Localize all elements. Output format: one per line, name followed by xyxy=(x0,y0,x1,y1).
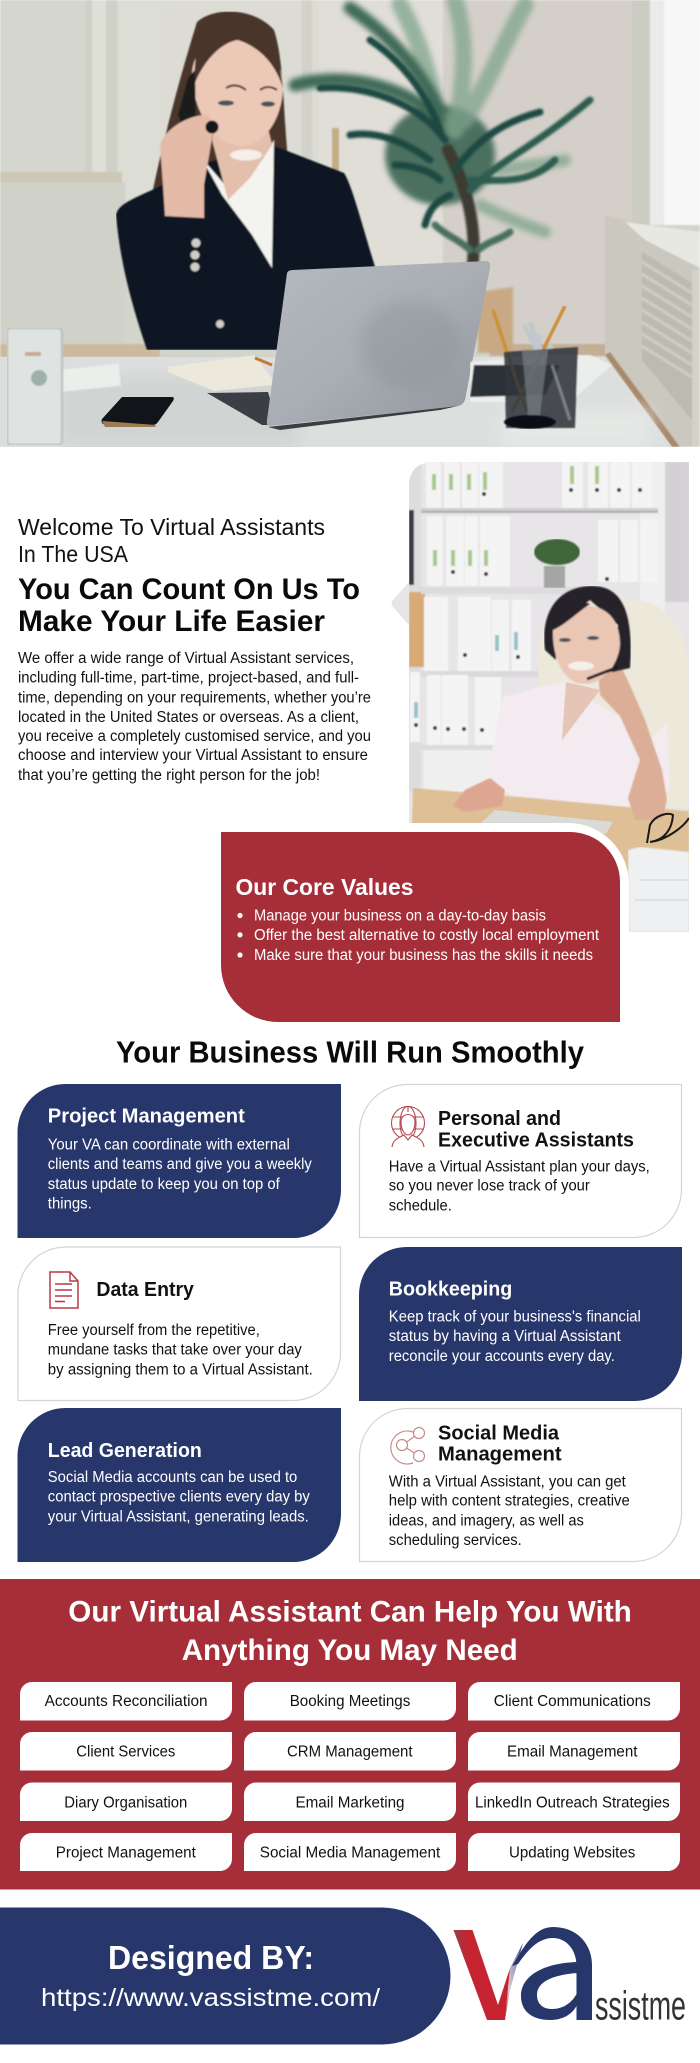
notebook xyxy=(168,355,272,391)
panel: services band xyxy=(0,1579,700,1890)
woman xyxy=(116,12,376,350)
card: bookkeeping: Bookkeeping xyxy=(389,1278,512,1301)
service buttons: Booking Meetings xyxy=(290,1693,411,1710)
shirt xyxy=(487,680,670,808)
card: bookkeeping: Keep track of your business's financial xyxy=(389,1309,641,1326)
eyeglasses xyxy=(647,814,689,843)
card: bookkeeping xyxy=(359,1247,682,1401)
welcome line: Welcome To Virtual Assistants xyxy=(18,514,325,540)
binders xyxy=(410,462,658,745)
icon: document xyxy=(50,1272,78,1308)
intro paragraph: including full-time, part-time, project-based, and full- xyxy=(18,670,359,686)
card: personal and executive assistants: Personal and xyxy=(438,1107,561,1130)
card: project management xyxy=(18,1084,341,1238)
panel: footer credit: Designed BY: xyxy=(108,1939,314,1976)
main heading: You Can Count On Us To xyxy=(18,573,360,606)
services heading xyxy=(68,1596,632,1667)
card: personal and executive assistants: Have a Virtual Assistant plan your days, xyxy=(389,1158,650,1175)
welcome line xyxy=(18,514,325,567)
office photo: smiling assistant with headset xyxy=(390,460,690,935)
chair xyxy=(537,598,688,808)
card: data entry: Data Entry xyxy=(96,1278,194,1301)
welcome line: In The USA xyxy=(18,541,129,567)
services heading: Anything You May Need xyxy=(182,1634,518,1667)
card: project management: Your VA can coordinate with external xyxy=(48,1136,290,1153)
service buttons: Client Communications xyxy=(494,1693,651,1710)
phone xyxy=(102,397,174,425)
service buttons: Client Services xyxy=(76,1744,176,1761)
panel: footer credit xyxy=(0,1908,450,2044)
main heading xyxy=(18,573,360,638)
intro paragraph: you receive a completely customised service, and you xyxy=(18,728,371,745)
card: lead generation: contact prospective clients every day by xyxy=(48,1488,310,1505)
card: lead generation: Social Media accounts can be used to xyxy=(48,1469,297,1486)
card: social media management: Social Media xyxy=(438,1421,560,1444)
intro paragraph: that you’re getting the right person for the job! xyxy=(18,767,320,784)
card: lead generation: Lead Generation xyxy=(48,1439,202,1462)
arm xyxy=(598,664,667,820)
card: personal and executive assistants: Executive Assistants xyxy=(438,1128,634,1151)
laptop xyxy=(207,261,490,430)
intro paragraph: time, depending on your requirements, whether you’re xyxy=(18,690,371,706)
core values list: Manage your business on a day-to-day basis xyxy=(254,908,546,925)
logo: VAssistme xyxy=(454,1927,686,2028)
core values heading: Our Core Values xyxy=(236,874,414,900)
panel: footer credit: https://www.vassistme.com/ xyxy=(41,1984,380,2012)
service buttons: Updating Websites xyxy=(509,1844,636,1861)
icon: globe with person xyxy=(392,1106,424,1147)
card: personal and executive assistants xyxy=(360,1084,682,1238)
card: personal and executive assistants: schedule. xyxy=(389,1198,452,1215)
plant xyxy=(295,0,590,262)
card: bookkeeping: status by having a Virtual Assistant xyxy=(389,1328,621,1345)
card: data entry: by assigning them to a Virtual Assistant. xyxy=(48,1361,313,1378)
card: data entry: Free yourself from the repetitive, xyxy=(48,1322,260,1339)
service buttons: Email Marketing xyxy=(296,1794,404,1811)
services heading: Our Virtual Assistant Can Help You With xyxy=(68,1596,632,1629)
intro text block xyxy=(18,514,371,784)
card: data entry: mundane tasks that take over your day xyxy=(48,1341,302,1358)
service buttons: Project Management xyxy=(56,1844,196,1861)
desk plant xyxy=(534,539,580,588)
service buttons: Accounts Reconciliation xyxy=(45,1693,208,1710)
service buttons: Email Management xyxy=(507,1744,638,1761)
hero photo: assistant at laptop xyxy=(0,0,700,447)
service buttons: Diary Organisation xyxy=(64,1794,187,1811)
core values list: Offer the best alternative to costly local employment xyxy=(254,927,600,944)
desk xyxy=(0,357,672,447)
card: project management: status update to keep you on top of xyxy=(48,1176,280,1193)
pencil on notebook xyxy=(255,358,272,365)
intro paragraph: We offer a wide range of Virtual Assistant services, xyxy=(18,650,354,667)
card: social media management xyxy=(360,1408,682,1562)
card: personal and executive assistants: so you never lose track of your xyxy=(389,1178,590,1195)
card: data entry xyxy=(18,1247,340,1400)
white ring around core values xyxy=(215,823,629,932)
card: social media management: Management xyxy=(438,1443,562,1466)
papers and pen holder xyxy=(470,306,612,429)
intro paragraph xyxy=(18,650,371,784)
icon: social network xyxy=(391,1428,424,1464)
card: social media management: ideas, and imagery, as well as xyxy=(389,1513,584,1530)
core values list: Make sure that your business has the skills it needs xyxy=(254,947,593,964)
panel: core values xyxy=(221,832,620,1022)
card: lead generation xyxy=(18,1408,341,1562)
card: social media management: scheduling services. xyxy=(389,1532,522,1549)
card: social media management: help with content strategies, creative xyxy=(389,1493,630,1510)
card: bookkeeping: reconcile your accounts every day. xyxy=(389,1348,615,1365)
card: social media management: With a Virtual Assistant, you can get xyxy=(389,1473,626,1490)
plant pot xyxy=(478,287,513,353)
core values list xyxy=(237,908,600,964)
service buttons: Social Media Management xyxy=(260,1844,441,1861)
section heading: Your Business Will Run Smoothly xyxy=(116,1035,585,1070)
wooden desk xyxy=(409,788,689,932)
service buttons: LinkedIn Outreach Strategies xyxy=(475,1794,670,1811)
intro paragraph: located in the United States or overseas. As a client, xyxy=(18,709,359,726)
card: project management: things. xyxy=(48,1195,92,1212)
service buttons: CRM Management xyxy=(287,1744,413,1761)
card: project management: clients and teams and give you a weekly xyxy=(48,1156,312,1173)
card: project management: Project Management xyxy=(48,1105,245,1128)
service buttons xyxy=(20,1682,680,1871)
face and hair xyxy=(544,586,631,684)
papers xyxy=(628,847,689,932)
resting hand xyxy=(453,778,505,812)
keyboard xyxy=(473,810,613,834)
main heading: Make Your Life Easier xyxy=(18,605,326,638)
card: lead generation: your Virtual Assistant, generating leads. xyxy=(48,1508,309,1525)
intro paragraph: choose and interview your Virtual Assistant to ensure xyxy=(18,747,368,764)
glass of water xyxy=(7,328,121,445)
